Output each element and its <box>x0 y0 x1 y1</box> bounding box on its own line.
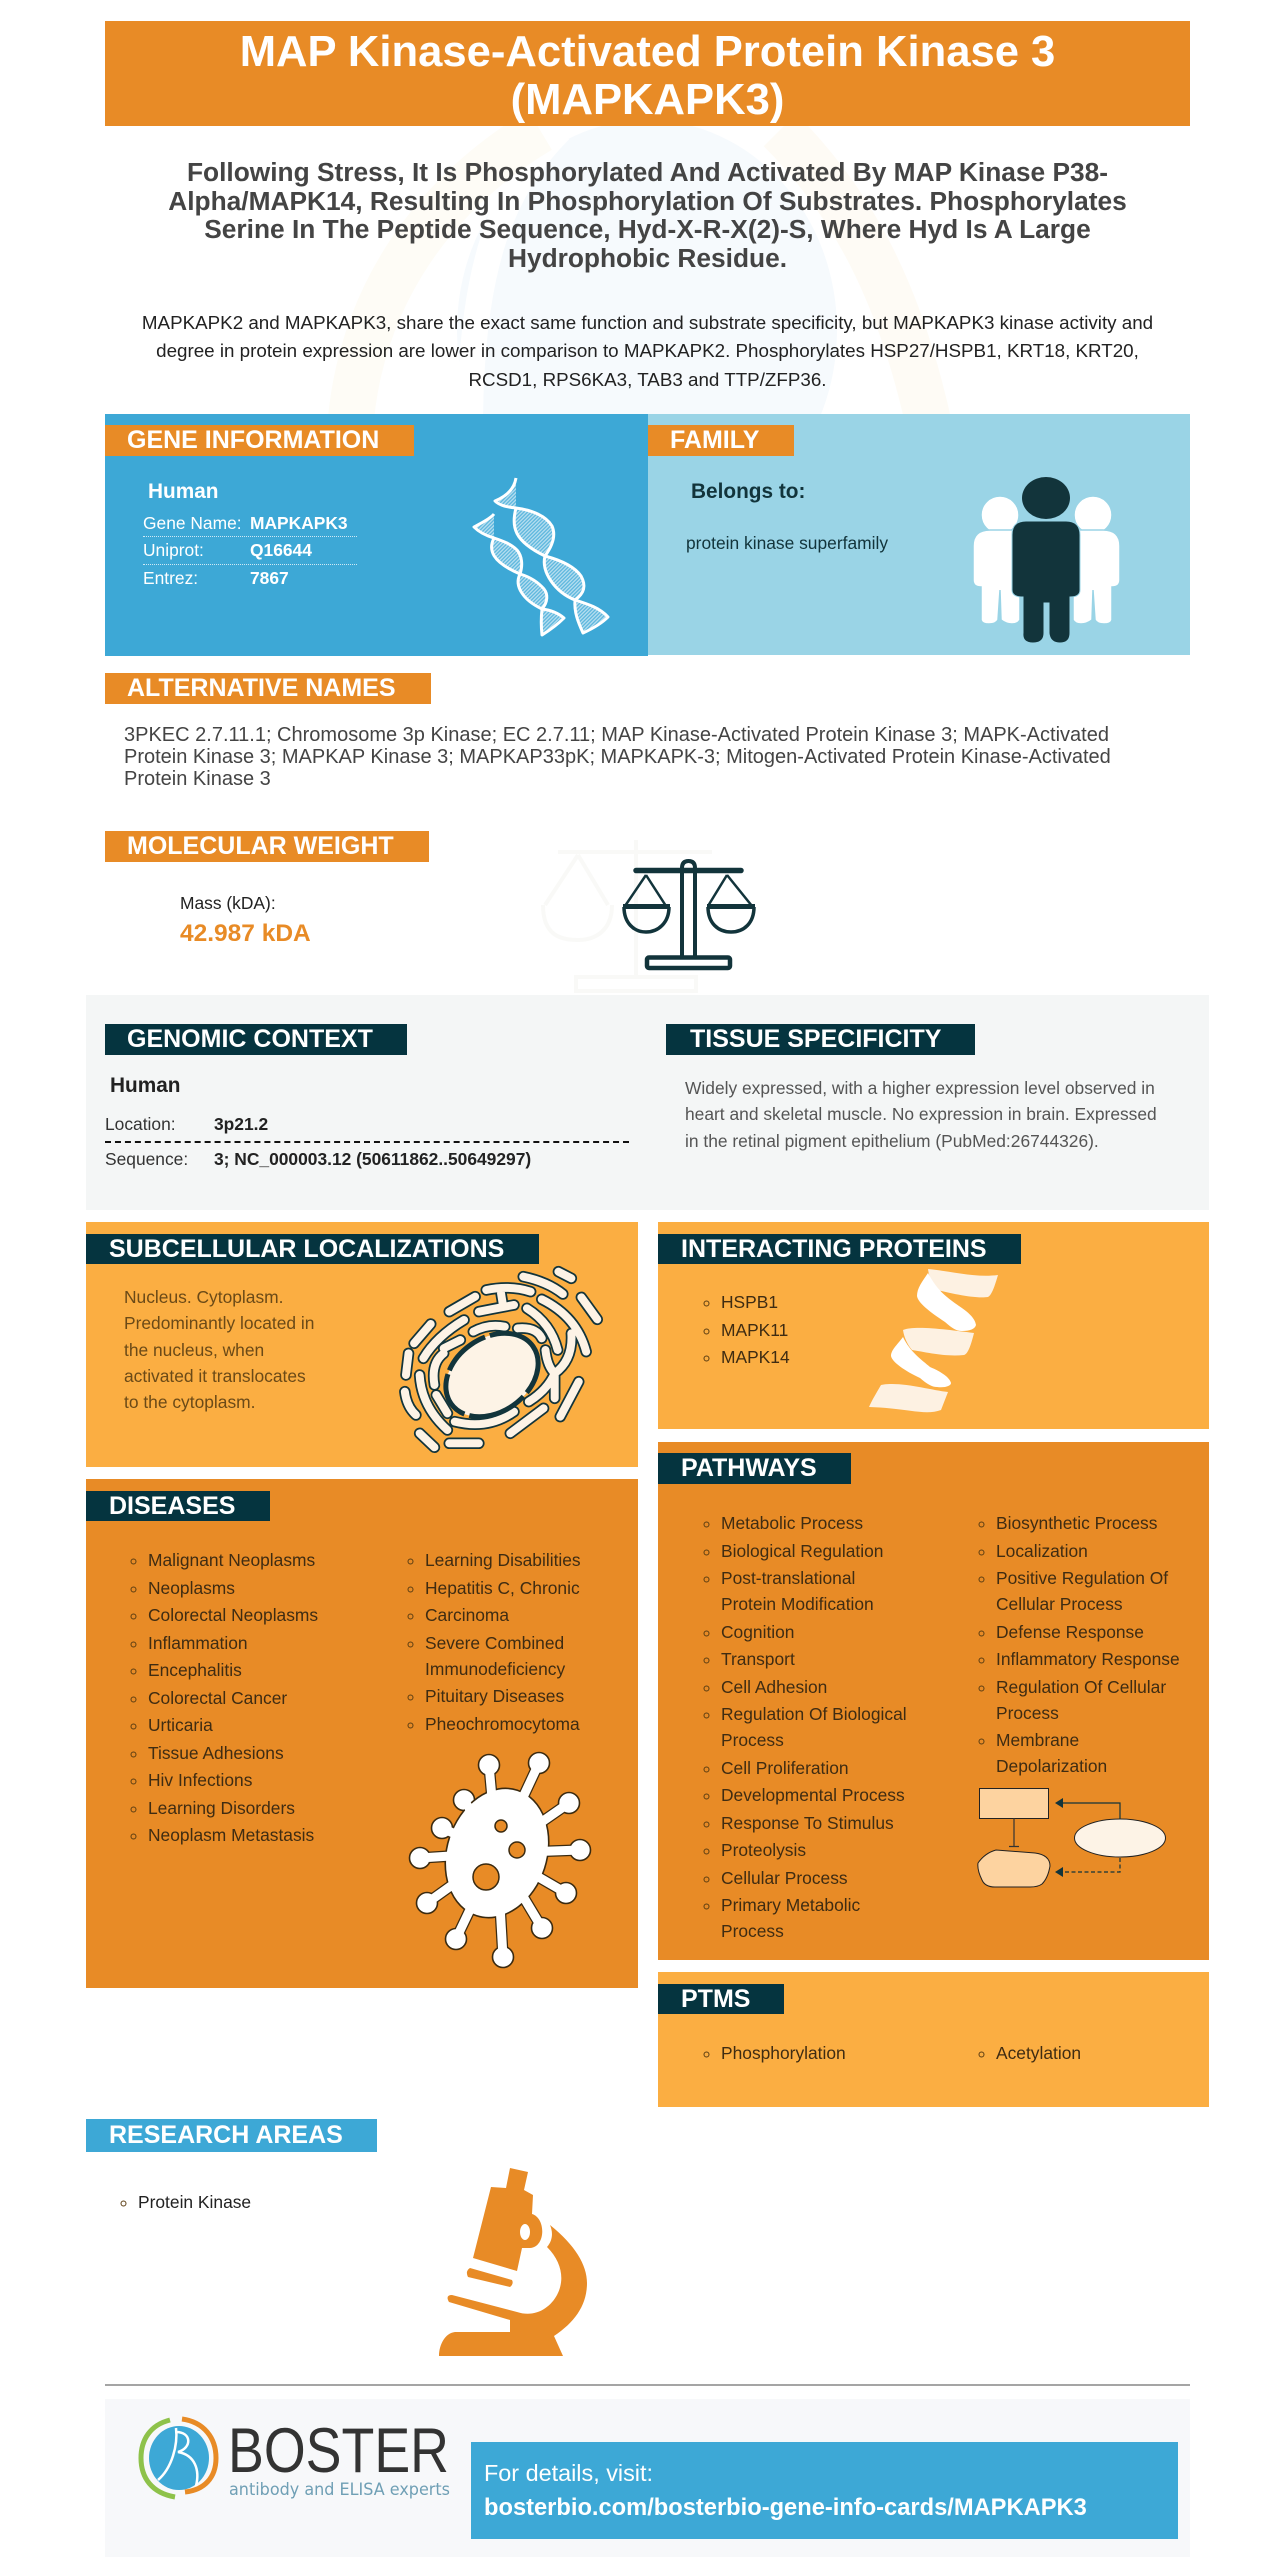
localization text: activated it translocates <box>124 1366 306 1386</box>
localization text: Predominantly located in <box>124 1313 314 1333</box>
icon: balance scale <box>622 859 756 970</box>
pathways list: column 1 <box>704 1513 907 1941</box>
intro paragraph <box>142 312 1153 390</box>
pathways list: column 1: Cognition <box>721 1622 794 1642</box>
panel: pathways <box>658 1442 1209 1960</box>
intro paragraph: RCSD1, RPS6KA3, TAB3 and TTP/ZFP36. <box>468 369 827 390</box>
heading: genomic context: GENOMIC CONTEXT <box>127 1025 373 1053</box>
title banner: MAP Kinase-Activated Protein Kinase 3 <box>240 28 1055 76</box>
watermark: faint logo <box>328 126 950 414</box>
disease list: column 1 <box>130 1550 318 1845</box>
row: uniprot: Uniprot: <box>143 540 204 560</box>
subtitle <box>168 157 1127 273</box>
PTM item: acetylation: Acetylation <box>996 2043 1081 2063</box>
divider rule <box>105 2384 1190 2386</box>
pathways list: column 2: Depolarization <box>996 1756 1107 1776</box>
icon: microscope <box>439 2168 587 2356</box>
research areas list: Protein Kinase <box>138 2192 251 2212</box>
logo: Boster <box>138 2416 450 2500</box>
alternative names text: Protein Kinase 3; MAPKAP Kinase 3; MAPKAP33pK; MAPKAPK-3; Mitogen-Activated Protein Kinase-Activated <box>124 746 1111 768</box>
heading: PTMs <box>658 1984 784 2014</box>
intro paragraph: degree in protein expression are lower in comparison to MAPKAPK2. Phosphorylates HSP27/HSPB1, KRT18, KRT20, <box>156 340 1139 361</box>
heading: research areas <box>86 2119 377 2152</box>
disease list: column 1: Colorectal Cancer <box>148 1688 287 1708</box>
row: uniprot <box>143 540 312 560</box>
tissue specificity text <box>685 1078 1157 1151</box>
pathways list: column 2: Inflammatory Response <box>996 1649 1180 1669</box>
tissue specificity text: heart and skeletal muscle. No expression in brain. Expressed <box>685 1104 1157 1124</box>
pathways list: column 1: Cellular Process <box>721 1868 848 1888</box>
localization text: the nucleus, when <box>124 1340 264 1360</box>
heading: alternative names: ALTERNATIVE NAMES <box>127 674 396 702</box>
pathways list: column 1: Process <box>721 1921 784 1941</box>
pathways list: column 1: Regulation Of Biological <box>721 1704 907 1724</box>
pathways list: column 1: Developmental Process <box>721 1785 905 1805</box>
row: uniprot: Q16644 <box>250 540 312 560</box>
alternative names text <box>124 724 1111 790</box>
tissue specificity text: in the retinal pigment epithelium (PubMed:26744326). <box>685 1131 1099 1151</box>
subtitle: Alpha/MAPK14, Resulting In Phosphorylation Of Substrates. Phosphorylates <box>168 186 1127 216</box>
heading: research areas: RESEARCH AREAS <box>109 2121 343 2149</box>
heading: molecular weight: MOLECULAR WEIGHT <box>127 832 394 860</box>
subtitle: Serine In The Peptide Sequence, Hyd-X-R-X(2)-S, Where Hyd Is A Large <box>204 214 1091 244</box>
pathways list: column 2: Membrane <box>996 1730 1079 1750</box>
PTM item: phosphorylation: Phosphorylation <box>721 2043 846 2063</box>
callout: details link <box>471 2442 1178 2539</box>
disease list: column 2: Hepatitis C, Chronic <box>425 1578 580 1598</box>
pathways list: column 1: Cell Proliferation <box>721 1758 849 1778</box>
disease list: column 2: Immunodeficiency <box>425 1658 565 1678</box>
disease list: column 2: Pheochromocytoma <box>425 1714 580 1734</box>
icon: protein ribbon <box>869 1269 998 1412</box>
protein list: MAPK14 <box>721 1347 790 1367</box>
heading: subcellular localizations: SUBCELLULAR LOCALIZATIONS <box>109 1235 504 1263</box>
localization text: to the cytoplasm. <box>124 1392 255 1412</box>
panel: genomic context and tissue specificity <box>86 995 1209 1210</box>
pathways list: column 1: Biological Regulation <box>721 1540 883 1560</box>
disease list: column 1: Urticaria <box>148 1715 213 1735</box>
row: entrez <box>143 568 289 588</box>
belongs to label: Belongs to: <box>691 480 805 503</box>
panel: footer <box>105 2399 1190 2557</box>
heading: pathways: PATHWAYS <box>681 1454 817 1482</box>
row: entrez: 7867 <box>250 568 289 588</box>
localization text <box>124 1287 314 1412</box>
row: location: 3p21.2 <box>214 1114 268 1134</box>
panel: family <box>648 414 1190 655</box>
callout label: For details, visit: <box>484 2460 653 2486</box>
panel: gene information <box>105 414 648 656</box>
icon: people group <box>974 477 1120 642</box>
pathways list: column 1: Response To Stimulus <box>721 1812 894 1832</box>
title banner: (MAPKAPK3) <box>511 76 784 124</box>
pathways list: column 2: Biosynthetic Process <box>996 1513 1157 1533</box>
disease list: column 2: Carcinoma <box>425 1605 509 1625</box>
disease list: column 2: Severe Combined <box>425 1632 564 1652</box>
logo: Boster: antibody and ELISA experts <box>229 2480 450 2499</box>
icon: virus <box>408 1752 592 1968</box>
disease list: column 2: Learning Disabilities <box>425 1550 581 1570</box>
localization text: Nucleus. Cytoplasm. <box>124 1287 283 1307</box>
row: entrez: Entrez: <box>143 568 198 588</box>
disease list: column 1: Encephalitis <box>148 1660 242 1680</box>
pathways list: column 1: Primary Metabolic <box>721 1895 860 1915</box>
pathways list: column 1: Transport <box>721 1649 795 1669</box>
disease list: column 1: Neoplasms <box>148 1578 235 1598</box>
heading: PTMs: PTMS <box>681 1985 750 2013</box>
heading: diseases <box>86 1491 270 1521</box>
disease list: column 1: Neoplasm Metastasis <box>148 1825 314 1845</box>
row: location <box>105 1114 268 1134</box>
title banner <box>105 21 1190 126</box>
disease list: column 1: Inflammation <box>148 1632 248 1652</box>
panel: interacting proteins <box>658 1222 1209 1429</box>
disease list: column 1: Colorectal Neoplasms <box>148 1605 318 1625</box>
disease list: column 1: Hiv Infections <box>148 1770 252 1790</box>
pathways list: column 1: Protein Modification <box>721 1594 874 1614</box>
disease list: column 2 <box>408 1550 581 1734</box>
icon: pathway diagram <box>977 1788 1166 1888</box>
pathways list: column 2 <box>978 1513 1180 1776</box>
pathways list: column 2: Defense Response <box>996 1622 1144 1642</box>
tissue specificity text: Widely expressed, with a higher expression level observed in <box>685 1078 1155 1098</box>
species label: Human <box>148 480 218 503</box>
protein list <box>704 1292 790 1367</box>
pathways list: column 1: Post-translational <box>721 1568 855 1588</box>
heading: tissue specificity: TISSUE SPECIFICITY <box>690 1025 941 1053</box>
panel: subcellular localizations <box>86 1222 638 1467</box>
logo: Boster: BOSTER <box>228 2416 449 2486</box>
row: gene name <box>143 513 348 533</box>
subtitle: Following Stress, It Is Phosphorylated And Activated By MAP Kinase P38- <box>187 157 1108 187</box>
heading: interacting proteins: INTERACTING PROTEINS <box>681 1235 987 1263</box>
pathways list: column 2: Regulation Of Cellular <box>996 1676 1166 1696</box>
alternative names text: 3PKEC 2.7.11.1; Chromosome 3p Kinase; EC 2.7.11; MAP Kinase-Activated Protein Kinase 3; MAPK-Activated <box>124 724 1109 746</box>
pathways list: column 2: Localization <box>996 1540 1088 1560</box>
mass label: Mass (kDA): <box>180 893 276 913</box>
row: sequence: 3; NC_000003.12 (50611862..50649297) <box>214 1149 531 1169</box>
species label: Human <box>110 1074 180 1097</box>
pathways list: column 2: Process <box>996 1702 1059 1722</box>
heading: diseases: DISEASES <box>109 1492 235 1520</box>
family name: protein kinase superfamily <box>686 533 888 553</box>
heading: family: FAMILY <box>670 426 759 454</box>
panel: diseases <box>86 1479 638 1988</box>
intro paragraph: MAPKAPK2 and MAPKAPK3, share the exact same function and substrate specificity, but MAPKAPK3 kinase activity and <box>142 312 1153 333</box>
heading: pathways <box>658 1453 851 1484</box>
alternative names text: Protein Kinase 3 <box>124 768 271 790</box>
row: sequence: Sequence: <box>105 1149 188 1169</box>
disease list: column 1: Tissue Adhesions <box>148 1742 284 1762</box>
row: location: Location: <box>105 1114 176 1134</box>
panel: PTMs <box>658 1972 1209 2107</box>
row: gene name: Gene Name: <box>143 513 242 533</box>
subtitle: Hydrophobic Residue. <box>508 243 787 273</box>
pathways list: column 2: Positive Regulation Of <box>996 1568 1168 1588</box>
pathways list: column 1: Cell Adhesion <box>721 1676 827 1696</box>
callout URL: bosterbio.com/bosterbio-gene-info-cards/MAPKAPK3 <box>484 2495 1087 2521</box>
disease list: column 1: Learning Disorders <box>148 1798 295 1818</box>
icon: DNA helix <box>472 478 610 636</box>
protein list: MAPK11 <box>721 1320 788 1340</box>
pathways list: column 2: Cellular Process <box>996 1594 1123 1614</box>
icon: ghost scale watermark <box>540 835 715 995</box>
heading: gene information: GENE INFORMATION <box>127 426 379 454</box>
pathways list: column 1: Process <box>721 1730 784 1750</box>
pathways list: column 1: Proteolysis <box>721 1840 806 1860</box>
disease list: column 1: Malignant Neoplasms <box>148 1550 315 1570</box>
icon: endoplasmic reticulum <box>399 1266 603 1453</box>
mass value: 42.987 kDA <box>180 920 311 947</box>
heading: family <box>648 425 794 456</box>
disease list: column 2: Pituitary Diseases <box>425 1686 564 1706</box>
pathways list: column 1: Metabolic Process <box>721 1513 863 1533</box>
protein list: HSPB1 <box>721 1292 778 1312</box>
row: gene name: MAPKAPK3 <box>250 513 348 533</box>
